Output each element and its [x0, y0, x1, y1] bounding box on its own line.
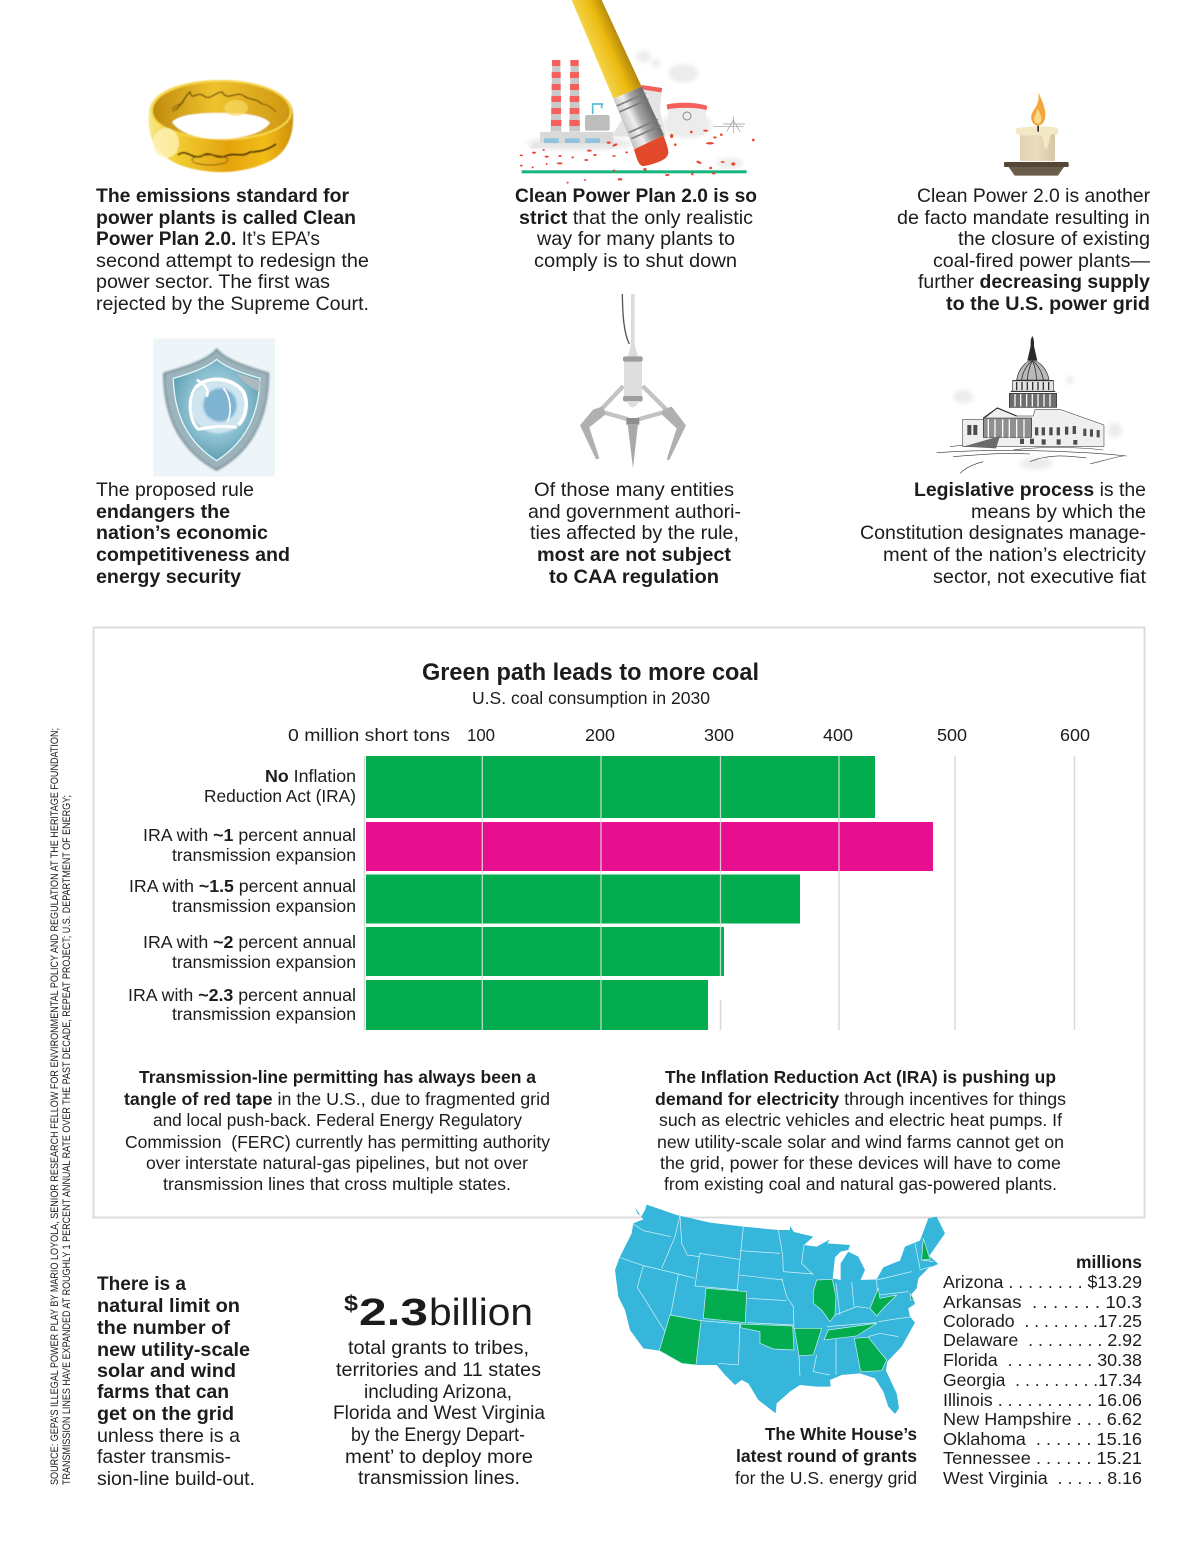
bar labels: transmission expansion: [172, 896, 356, 916]
table: grants by state: [943, 1252, 1142, 1488]
text: grants: Florida and West Virginia: [333, 1402, 545, 1424]
map caption: The White House’s: [765, 1424, 917, 1444]
text: not subject to CAA: to CAA regulation: [549, 566, 719, 588]
text: de facto mandate: the closure of existing: [958, 228, 1150, 250]
big number: $2.3 billion: 2.3: [359, 1292, 428, 1334]
grant states in green: [659, 1238, 930, 1372]
bar labels: IRA with ~1.5 percent annual: [129, 876, 356, 896]
text: natural limit: the number of: [97, 1317, 231, 1339]
text: strict plan: strict that the only realistic: [519, 207, 753, 229]
bar labels: [128, 766, 356, 1024]
text: strict plan: Clean Power Plan 2.0 is so: [515, 185, 757, 207]
text: natural limit: There is a: [97, 1273, 186, 1295]
text: legislative process: sector, not executive fiat: [933, 566, 1147, 588]
map caption: latest round of grants: [736, 1446, 917, 1466]
text: emissions standard: power plants is called Clean: [96, 207, 356, 229]
axis labels: 500: [937, 725, 967, 745]
text: natural limit: get on the grid: [97, 1403, 234, 1425]
text: de facto mandate: further decreasing supply: [918, 271, 1150, 293]
bar labels: IRA with ~2 percent annual: [143, 932, 356, 952]
table: grants by state: Georgia . . . . . . . . .17.34: [943, 1370, 1142, 1390]
text: emissions standard: power sector. The first was: [96, 271, 330, 293]
US map: [615, 1205, 945, 1414]
text: de facto mandate: [897, 185, 1151, 315]
icon: shield: [153, 338, 275, 477]
text: emissions standard: rejected by the Supreme Court.: [96, 293, 369, 315]
text: not subject to CAA: most are not subject: [537, 544, 732, 566]
axis labels: 400: [823, 725, 853, 745]
text: endangers: nation’s economic: [96, 522, 268, 544]
text: de facto mandate: to the U.S. power grid: [946, 293, 1150, 315]
text: strict plan: way for many plants to: [536, 228, 735, 250]
text: strict plan: [515, 185, 757, 272]
bar labels: transmission expansion: [172, 845, 356, 865]
text: red tape: transmission lines that cross multiple states.: [163, 1174, 511, 1194]
text: emissions standard: [96, 185, 369, 315]
text: endangers: competitiveness and: [96, 544, 290, 566]
text: grants: total grants to tribes,: [348, 1337, 529, 1359]
axis labels: 100: [467, 725, 495, 745]
text: grants: transmission lines.: [358, 1467, 520, 1489]
table: grants by state: Florida . . . . . . . . . 30.38: [943, 1350, 1142, 1370]
table: grants by state: Arkansas . . . . . . . 10.3: [943, 1292, 1142, 1312]
text: IRA demand: the grid, power for these devices will have to come: [660, 1153, 1061, 1173]
text: not subject to CAA: Of those many entities: [534, 479, 734, 501]
text: IRA demand: new utility-scale solar and wind farms cannot get on: [657, 1132, 1064, 1152]
bar labels: IRA with ~1 percent annual: [143, 825, 356, 845]
big number: $2.3 billion: $: [344, 1291, 358, 1316]
text: de facto mandate: Clean Power 2.0 is another: [917, 185, 1151, 207]
big number: $2.3 billion: billion: [429, 1292, 533, 1334]
text: natural limit: new utility-scale: [97, 1339, 250, 1361]
text: red tape: [124, 1067, 550, 1194]
text: IRA demand: such as electric vehicles and electric heat pumps. If: [659, 1110, 1062, 1130]
axis labels: 600: [1060, 725, 1090, 745]
axis labels: [288, 725, 1090, 745]
icon: gold ring: [149, 80, 293, 172]
source note: TRANSMISSION LINES HAVE EXPANDED AT ROUGHLY 1 PERCENT ANNUAL RATE OVER THE PAST DECADE, REPEAT PROJECT; U.S. DEPARTMENT OF ENERGY;: [61, 795, 73, 1485]
text: natural limit: unless there is a: [97, 1425, 240, 1447]
source note: SOURCE: GEPA’S ILLEGAL POWER PLAY BY MARIO LOYOLA, SENIOR RESEARCH FELLOW FOR ENVIRONMENTAL POLICY AND REGULATION AT THE HERITAGE FOUNDATION;: [49, 728, 61, 1485]
table: grants by state: Arizona . . . . . . . . $13.29: [943, 1272, 1142, 1292]
text: emissions standard: Power Plan 2.0. It’s EPA’s: [96, 228, 320, 250]
table: grants by state: Tennessee . . . . . . 15.21: [943, 1448, 1142, 1468]
text: endangers: [96, 479, 290, 588]
text: grants: including Arizona,: [364, 1381, 512, 1403]
icon: candle: [1004, 92, 1069, 176]
text: red tape: over interstate natural-gas pipelines, but not over: [146, 1153, 528, 1173]
text: natural limit: sion-line build-out.: [97, 1468, 255, 1490]
chart subtitle: U.S. coal consumption in 2030: [472, 688, 710, 708]
icon: pencil erasing power plant: [520, 0, 755, 184]
bar labels: transmission expansion: [172, 952, 356, 972]
text: not subject to CAA: [528, 479, 741, 588]
table: grants by state: Colorado . . . . . . . .17.25: [943, 1311, 1142, 1331]
text: emissions standard: The emissions standard for: [96, 185, 349, 207]
text: de facto mandate: de facto mandate resulting in: [897, 207, 1150, 229]
text: grants: territories and 11 states: [336, 1359, 541, 1381]
text: natural limit: faster transmis-: [97, 1446, 231, 1468]
source note: [49, 728, 73, 1485]
text: legislative process: Legislative process is the: [914, 479, 1146, 501]
axis labels: 200: [585, 725, 615, 745]
text: red tape: and local push-back. Federal Energy Regulatory: [153, 1110, 522, 1130]
text: IRA demand: from existing coal and natural gas-powered plants.: [664, 1174, 1057, 1194]
text: natural limit: farms that can: [97, 1381, 229, 1403]
text: legislative process: ment of the nation’s electricity: [883, 544, 1146, 566]
text: endangers: endangers the: [96, 501, 230, 523]
bar chart: [128, 725, 1090, 1030]
text: endangers: The proposed rule: [96, 479, 254, 501]
bar labels: Reduction Act (IRA): [204, 786, 356, 806]
text: IRA demand: demand for electricity through incentives for things: [655, 1089, 1066, 1109]
text: legislative process: means by which the: [971, 501, 1146, 523]
bar labels: transmission expansion: [172, 1004, 356, 1024]
map caption: [735, 1424, 917, 1488]
map caption: for the U.S. energy grid: [735, 1468, 917, 1488]
panel: coal consumption: [94, 628, 1144, 1218]
bar labels: IRA with ~2.3 percent annual: [128, 985, 356, 1005]
axis labels: 300: [704, 725, 734, 745]
bar labels: No Inflation: [265, 766, 356, 786]
text: red tape: tangle of red tape in the U.S., due to fragmented grid: [124, 1089, 550, 1109]
text: natural limit: [97, 1273, 255, 1490]
bars: [366, 756, 933, 1030]
text: not subject to CAA: and government authori-: [528, 501, 741, 523]
table: grants by state: millions: [1076, 1252, 1142, 1272]
text: grants: by the Energy Depart-: [351, 1424, 525, 1446]
text: natural limit: solar and wind: [97, 1360, 236, 1382]
text: IRA demand: The Inflation Reduction Act (IRA) is pushing up: [665, 1067, 1056, 1087]
table: grants by state: New Hampshire . . . 6.62: [943, 1409, 1142, 1429]
table: grants by state: Oklahoma . . . . . . 15.16: [943, 1429, 1142, 1449]
text: strict plan: comply is to shut down: [534, 250, 737, 272]
text: not subject to CAA: ties affected by the rule,: [530, 522, 739, 544]
icon: US Capitol: [937, 336, 1127, 473]
table: grants by state: Delaware . . . . . . . . 2.92: [943, 1330, 1142, 1350]
text: legislative process: Constitution designates manage-: [860, 522, 1146, 544]
chart title: Green path leads to more coal: [422, 659, 759, 686]
icon: mechanical claw: [580, 294, 686, 468]
big number: $2.3 billion: [344, 1291, 533, 1334]
table: grants by state: West Virginia . . . . . 8.16: [943, 1468, 1142, 1488]
text: red tape: Transmission-line permitting has always been a: [139, 1067, 536, 1087]
text: red tape: Commission (FERC) currently has permitting authority: [125, 1132, 550, 1152]
text: de facto mandate: coal-fired power plants—: [933, 250, 1150, 272]
text: endangers: energy security: [96, 566, 241, 588]
table: grants by state: Illinois . . . . . . . . . . 16.06: [943, 1390, 1142, 1410]
text: IRA demand: [655, 1067, 1066, 1194]
axis labels: 0 million short tons: [288, 725, 450, 745]
text: grants: ment’ to deploy more: [345, 1446, 533, 1468]
text: legislative process: [860, 479, 1147, 588]
text: natural limit: natural limit on: [97, 1295, 240, 1317]
text: grants: [333, 1337, 545, 1489]
text: emissions standard: second attempt to redesign the: [96, 250, 369, 272]
